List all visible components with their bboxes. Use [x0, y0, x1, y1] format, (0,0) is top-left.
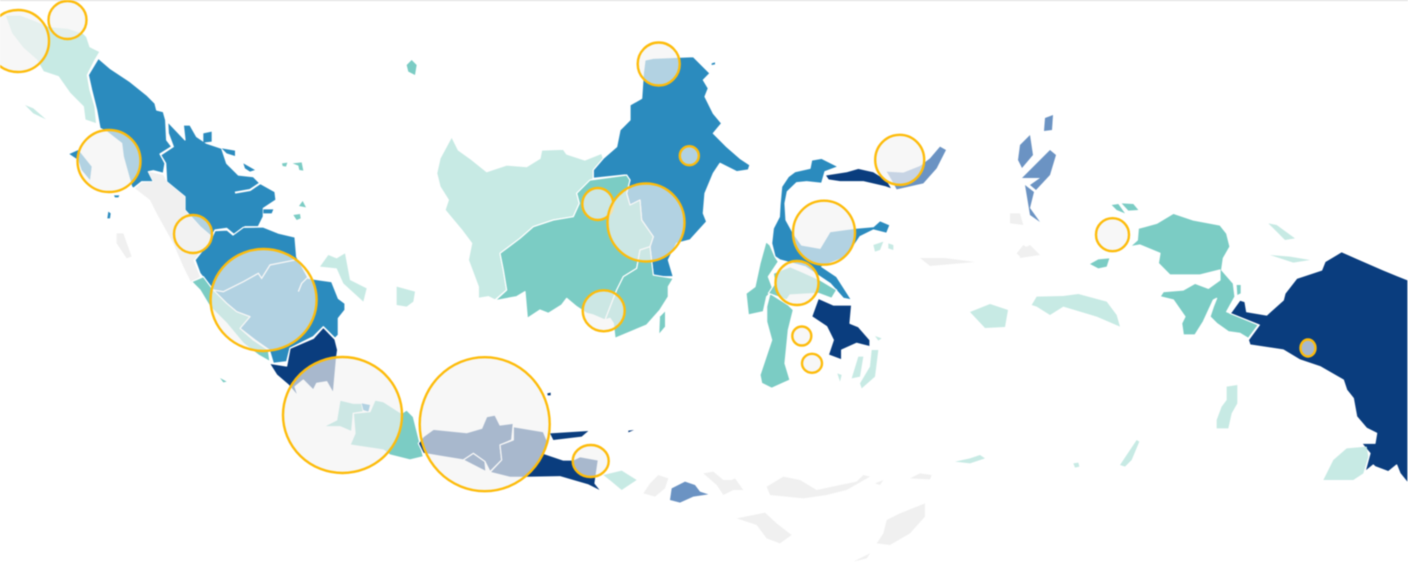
province: West Sulawesi: [746, 242, 778, 315]
bubble: West Java: [283, 357, 402, 473]
islands: Banggai and Buton: [837, 242, 893, 388]
province: Riau: [161, 122, 276, 237]
islands: Sumbawa east: [703, 472, 743, 495]
bubble: Central Kalimantan north: [582, 188, 613, 220]
island: Simeulue: [25, 105, 46, 119]
region: Sulawesi: [746, 147, 946, 388]
province: South Sulawesi: [760, 293, 793, 388]
province: Bengkulu: [192, 277, 270, 362]
bubble: North Kalimantan: [638, 42, 680, 86]
province: East and North Kalimantan: [593, 57, 750, 277]
province: Aceh: [5, 15, 100, 124]
province: Central Kalimantan: [495, 175, 653, 320]
province: Banten: [323, 400, 363, 432]
island: Buru: [970, 304, 1008, 328]
bubble: South Kalimantan: [583, 290, 625, 331]
islands: Biak and Yapen: [1268, 223, 1295, 240]
island: Mentawai: [117, 233, 132, 258]
province: Riau Islands: [293, 162, 303, 171]
province: North Maluku: [1018, 115, 1056, 222]
province: West Sumatra: [135, 172, 212, 283]
province: Southeast Sulawesi: [812, 298, 870, 360]
island: Wetar: [955, 455, 985, 463]
island: Sumbawa: [670, 482, 708, 503]
bubble: North Sulawesi: [875, 135, 924, 185]
island: Alor: [910, 473, 932, 479]
bubble: North Sumatra: [78, 130, 140, 192]
bubble: Selayar upper: [792, 326, 811, 346]
island: Pulau Laut: [659, 312, 665, 333]
region: Java: [323, 393, 634, 492]
province: South Kalimantan: [605, 247, 673, 338]
bubble: Madura: [573, 445, 609, 477]
islands: Raja Ampat: [1090, 203, 1241, 295]
bubble: East Kalimantan small: [680, 146, 699, 165]
bubble: Central Sulawesi: [793, 201, 855, 265]
province: Gorontalo: [825, 168, 892, 189]
island: Timor: [877, 503, 925, 545]
bubble: Papua: [1300, 340, 1316, 356]
riau islands: [203, 132, 212, 143]
region: Papua: [1090, 203, 1408, 483]
province: Bali: [603, 471, 637, 490]
island: Lombok: [643, 475, 668, 497]
province: North Sulawesi: [887, 147, 946, 189]
islands: Aru: [1217, 385, 1237, 428]
bubble: West Sumatra: [174, 215, 212, 253]
bubble: East Kalimantan: [608, 184, 684, 262]
province: West Papua: [1130, 213, 1258, 338]
bubble: Aceh north: [48, 1, 86, 39]
province: Jakarta: [362, 403, 370, 412]
island: Flores: [767, 475, 870, 498]
bubble: South Sumatra: [211, 249, 317, 351]
island: Madura: [550, 431, 588, 440]
island: Sumba: [737, 513, 792, 543]
bubble: South Sulawesi north: [776, 261, 818, 305]
province: East Java: [490, 427, 602, 492]
province: West Java: [350, 400, 423, 460]
province: Lampung: [269, 327, 338, 397]
province: Central Sulawesi: [772, 158, 890, 300]
region: Lesser Sunda Islands: [603, 455, 985, 562]
region: Sumatra: [5, 15, 417, 397]
bubble: North Maluku: [1096, 218, 1129, 251]
region: Kalimantan: [437, 57, 750, 338]
island: Nias: [69, 150, 92, 180]
province: Bangka Belitung: [320, 253, 367, 302]
region: Maluku: [920, 115, 1139, 468]
bubble: Aceh: [0, 10, 49, 72]
province: North Sumatra: [88, 58, 172, 188]
province: West Kalimantan: [437, 137, 603, 300]
creek: [235, 183, 260, 193]
island: Seram: [1032, 294, 1120, 327]
bubble: Central Java: [420, 357, 550, 491]
bubble: Selayar lower: [802, 354, 822, 373]
province: Papua: [1230, 252, 1408, 483]
province: Central Java: [418, 415, 513, 472]
provinces: Jambi and South Sumatra: [195, 227, 345, 363]
province: Yogyakarta: [463, 453, 486, 472]
bubbles: overlay circles: [0, 1, 1316, 491]
island: Dolak: [1323, 447, 1368, 480]
